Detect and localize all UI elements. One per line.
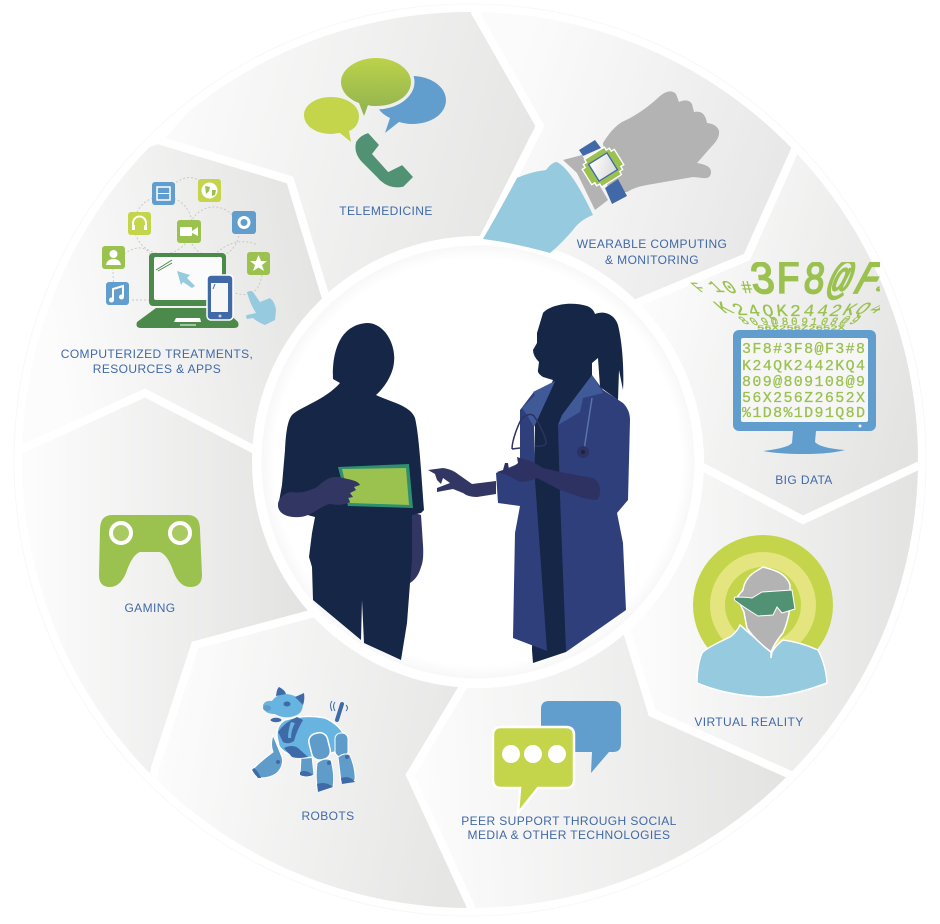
label: wearable computing: WEARABLE COMPUTING xyxy=(577,237,727,251)
flowing characters: 2 xyxy=(826,303,845,322)
flowing characters: 9 xyxy=(801,317,808,329)
label: telemedicine: TELEMEDICINE xyxy=(339,204,433,218)
icon: big data monitor: K24QK2442KQ4 xyxy=(742,358,865,375)
flowing characters: 4 xyxy=(745,302,764,322)
label: computerized treatments: COMPUTERIZED TREATMENTS, xyxy=(61,347,253,361)
coat collars xyxy=(522,375,603,427)
flowing characters: Q xyxy=(760,303,776,322)
panel: telemedicine xyxy=(223,12,536,292)
row 2: K xyxy=(709,299,741,318)
label: virtual reality: VIRTUAL REALITY xyxy=(694,715,804,729)
flowing characters: 3 xyxy=(747,255,779,308)
icon: person tile xyxy=(102,246,125,269)
flowing characters: 0 xyxy=(819,317,830,329)
icon: virtual reality person xyxy=(693,535,833,697)
icon: star tile xyxy=(247,252,270,275)
icon: headphones tile xyxy=(128,212,151,235)
flowing characters: 1 xyxy=(703,279,730,297)
icon: computerized apps cluster xyxy=(102,178,276,328)
flowing characters: K xyxy=(776,302,789,322)
label: peer support: PEER SUPPORT THROUGH SOCIAL xyxy=(461,814,677,828)
icon: game controller xyxy=(99,515,202,587)
flowing characters: 8 xyxy=(781,317,789,329)
icon: laptop xyxy=(136,253,238,328)
illustration: patient silhouette xyxy=(278,323,424,660)
flowing characters: 4 xyxy=(859,299,895,318)
icon: robot dog xyxy=(252,687,355,792)
label: gaming: GAMING xyxy=(124,601,176,615)
icon: gear tile xyxy=(232,211,256,234)
panel: center circle xyxy=(252,236,704,688)
panel: computerized treatments xyxy=(88,144,322,444)
flowing characters: 0 xyxy=(791,317,798,329)
icon: globe tile xyxy=(198,179,221,202)
label: monitoring: & MONITORING xyxy=(605,253,699,267)
flowing characters: # xyxy=(737,278,757,299)
icon: telemedicine bubbles and phone xyxy=(304,58,446,187)
flowing characters: @ xyxy=(770,317,780,329)
icon: cursor arrow xyxy=(177,271,195,288)
flowing characters: F xyxy=(843,255,894,307)
panel: gaming xyxy=(82,398,308,773)
tablet xyxy=(338,464,413,508)
flowing characters: Q xyxy=(848,301,876,320)
flowing characters: 4 xyxy=(802,302,816,322)
icon: big data monitor: 809@809108@9 xyxy=(742,374,865,391)
icon: peer support chat bubbles xyxy=(493,701,621,813)
icon: pointing hand xyxy=(246,291,276,325)
flowing characters xyxy=(690,262,880,330)
flowing characters: F xyxy=(687,281,714,297)
flowing characters: K xyxy=(838,301,861,320)
label: media and technologies: MEDIA & OTHER TECHNOLOGIES xyxy=(468,828,670,842)
flowing characters: 2 xyxy=(790,302,801,322)
patient arm xyxy=(278,477,360,517)
icon: big data monitor: 3F8#3F8@F3#8 xyxy=(742,341,865,358)
arms and hands xyxy=(428,468,496,497)
flowing characters: 4 xyxy=(814,303,830,322)
flowing characters: 0 xyxy=(747,316,762,329)
flowing characters: 0 xyxy=(718,279,743,299)
icon: big data monitor: 56X256Z2652X xyxy=(742,390,865,407)
flowing characters: F xyxy=(776,256,801,308)
body xyxy=(277,716,343,758)
row 3: 8 xyxy=(736,316,755,328)
icon: music tile xyxy=(106,282,129,305)
row 4: 56X256Z2652X xyxy=(757,325,846,332)
flowing characters: @ xyxy=(836,315,853,328)
stethoscope xyxy=(512,398,592,450)
panel: virtual reality xyxy=(693,470,918,771)
flowing characters: @ xyxy=(820,256,861,308)
icon: film tile xyxy=(152,182,175,205)
flowing characters: 1 xyxy=(809,317,819,329)
icon: big data monitor: %1D8%1D91Q8D xyxy=(742,405,865,422)
flowing characters: 9 xyxy=(844,316,863,328)
label: robots: ROBOTS xyxy=(301,809,355,823)
label: big data: BIG DATA xyxy=(775,473,833,487)
icon: big data monitor xyxy=(690,262,880,454)
flowing characters: 8 xyxy=(800,254,828,307)
extended front leg xyxy=(252,735,282,778)
flowing characters: 3 xyxy=(865,271,906,298)
flowing characters: 8 xyxy=(827,316,841,329)
label: resources and apps: RESOURCES & APPS xyxy=(93,362,221,376)
thighs and shins xyxy=(307,731,332,762)
panel: robots xyxy=(213,618,466,908)
icon: wrist with smart watch xyxy=(483,91,719,253)
panel: wearable computing xyxy=(546,30,791,299)
panel: peer support xyxy=(487,635,786,906)
head xyxy=(263,694,303,717)
flowing characters: 2 xyxy=(728,301,753,320)
other front leg xyxy=(300,756,314,776)
flowing characters: 9 xyxy=(759,316,771,329)
panel: big data xyxy=(685,154,918,516)
illustration: doctor silhouette xyxy=(428,304,630,663)
icon: phone xyxy=(207,275,233,320)
icon: video tile xyxy=(177,220,201,243)
